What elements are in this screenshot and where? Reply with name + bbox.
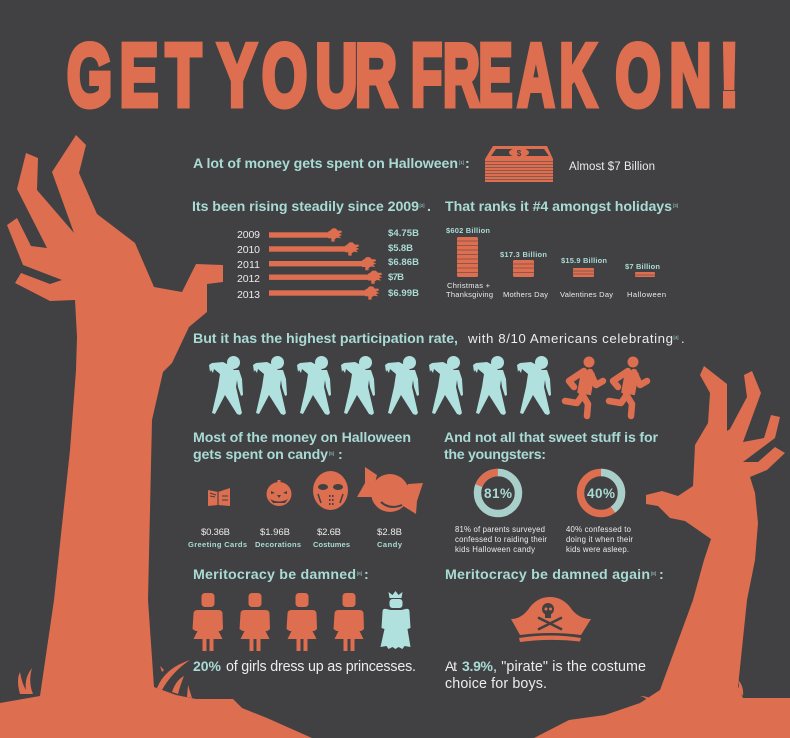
Mothers Day stack: Mothers Day (503, 290, 548, 299)
heading: participation rate: with 8/10 Americans celebrating (467, 331, 673, 346)
zombies (209, 356, 551, 415)
heading: meritocracy damned again: : (659, 567, 664, 583)
text: pirate statistic: 3.9% (462, 658, 494, 674)
heading: ranks fourth: That ranks it #4 amongst holidays (445, 199, 672, 215)
Mothers Day stack (500, 250, 548, 299)
caption: while kids asleep: kids were asleep. (566, 545, 629, 554)
title (67, 26, 739, 125)
Christmas stack: Thanksgiving (446, 290, 493, 299)
Halloween stack (625, 262, 666, 299)
pictogram: eight zombies and two runners (209, 356, 647, 416)
2012 row: $7B (388, 272, 404, 283)
icon: greeting card (208, 488, 230, 506)
heading: money spent: : (465, 156, 470, 172)
list: candy spending values: Candy (377, 540, 403, 549)
Valentines Day stack: $15.9 Billion (561, 256, 607, 265)
text: princess statistic: of girls dress up as princesses. (226, 659, 416, 675)
icon: pumpkin (266, 480, 292, 506)
donut chart: 40 percent: 40% (587, 486, 615, 501)
heading: money on candy: : (338, 447, 343, 463)
list: candy spending values: $2.6B (317, 527, 341, 538)
heading: money spent: A lot of money gets spent on Halloween (193, 156, 458, 172)
pictogram: four girls and one princess (192, 591, 410, 651)
list: candy spending values: Decorations (255, 540, 301, 549)
caption: while kids asleep: 40% confessed to (566, 525, 632, 534)
text: princess statistic: 20% (193, 658, 222, 674)
illustration: left zombie arm (0, 135, 312, 738)
Christmas stack: Christmas + (447, 281, 491, 290)
list: candy spending values: Greeting Cards (188, 540, 247, 549)
title: ON! (616, 26, 739, 124)
list: candy spending values: $0.36B (201, 527, 230, 538)
caption: while kids asleep: doing it when their (566, 535, 633, 544)
caption: parents raiding candy: kids Halloween candy (455, 545, 535, 554)
Christmas stack (446, 226, 493, 299)
heading: participation rate: . (681, 331, 685, 346)
2013 row (237, 286, 419, 301)
list: candy spending values (188, 527, 403, 549)
2010 row: 2010 (237, 244, 260, 256)
title: YOUR (218, 26, 397, 124)
text: pirate statistic: At (445, 658, 457, 674)
2009 row: 2009 (237, 229, 260, 241)
2012 row: 2012 (237, 273, 260, 285)
heading: money on candy: Most of the money on Halloween (193, 430, 411, 446)
girls (192, 593, 364, 651)
heading: money spent: [1] (459, 160, 464, 165)
heading: ranks fourth: [3] (673, 203, 678, 208)
princess (380, 591, 410, 649)
Halloween stack: $7 Billion (625, 262, 660, 271)
heading: sweet stuff (444, 430, 658, 463)
illustration: right zombie arm (534, 366, 790, 738)
icon: hockey mask (313, 471, 348, 510)
2011 row (237, 257, 419, 271)
2010 row (237, 242, 413, 256)
caption: parents raiding candy: confessed to raiding their (455, 535, 547, 544)
2009 row: $4.75B (388, 228, 419, 239)
heading: participation rate: [4] (674, 335, 679, 340)
text: pirate statistic: , "pirate" is the costume (493, 659, 646, 675)
heading: money on candy: gets spent on candy (193, 447, 328, 463)
2013 row: $6.99B (388, 288, 419, 299)
icon: pirate hat (511, 597, 591, 642)
title: GET (67, 26, 201, 124)
icon: stack of money (485, 146, 553, 182)
Valentines Day stack: Valentines Day (560, 290, 613, 299)
text: pirate statistic: choice for boys. (445, 676, 547, 692)
heading: meritocracy damned again: [8] (651, 571, 656, 576)
Mothers Day stack: $17.3 Billion (500, 250, 547, 259)
heading: rising since 2009: Its been rising steadily since 2009 (192, 199, 419, 215)
heading: sweet stuff: And not all that sweet stuff is for (444, 430, 658, 446)
caption: while kids asleep (566, 525, 633, 554)
caption: parents raiding candy (455, 525, 547, 554)
2012 row (237, 271, 404, 285)
runners (565, 356, 647, 416)
donut chart: 40 percent (580, 472, 622, 514)
chart: holiday spending stacks (446, 226, 666, 299)
2010 row: $5.8B (388, 243, 413, 254)
list: candy spending values: $2.8B (377, 527, 402, 538)
heading: rising since 2009: . (427, 199, 431, 215)
title: FREAK (411, 27, 596, 125)
heading: money on candy (193, 430, 411, 463)
icon: stack of money: $ (517, 149, 522, 158)
heading: money on candy: [5] (329, 451, 334, 456)
list: candy spending values: Costumes (313, 540, 350, 549)
2011 row: $6.86B (388, 257, 419, 268)
Halloween stack: Halloween (627, 290, 666, 299)
heading: meritocracy damned again: Meritocracy be damned again (445, 567, 650, 583)
heading: meritocracy be damned: : (364, 567, 369, 583)
heading: participation rate (193, 331, 685, 347)
2013 row: 2013 (237, 289, 260, 301)
2011 row: 2011 (237, 259, 260, 271)
caption: parents raiding candy: 81% of parents surveyed (455, 525, 545, 534)
2009 row (237, 228, 419, 242)
bar chart: spending by year (237, 228, 419, 301)
donut chart: 81 percent (472, 467, 524, 519)
heading: rising since 2009: [2] (420, 203, 425, 208)
text: pirate statistic (445, 658, 646, 692)
heading: meritocracy be damned: [6] (357, 571, 362, 576)
donut chart: 81 percent: 81% (484, 486, 512, 501)
icon: wrapped candy (357, 467, 423, 514)
heading: sweet stuff: the youngsters: (444, 447, 546, 463)
heading: meritocracy be damned: Meritocracy be damned (193, 567, 356, 583)
text: almost 7 billion: Almost $7 Billion (569, 161, 655, 173)
Christmas stack: $602 Billion (446, 226, 490, 235)
Valentines Day stack (560, 256, 613, 299)
heading: participation rate: But it has the highest participation rate, (193, 331, 458, 347)
list: candy spending values: $1.96B (260, 527, 290, 538)
